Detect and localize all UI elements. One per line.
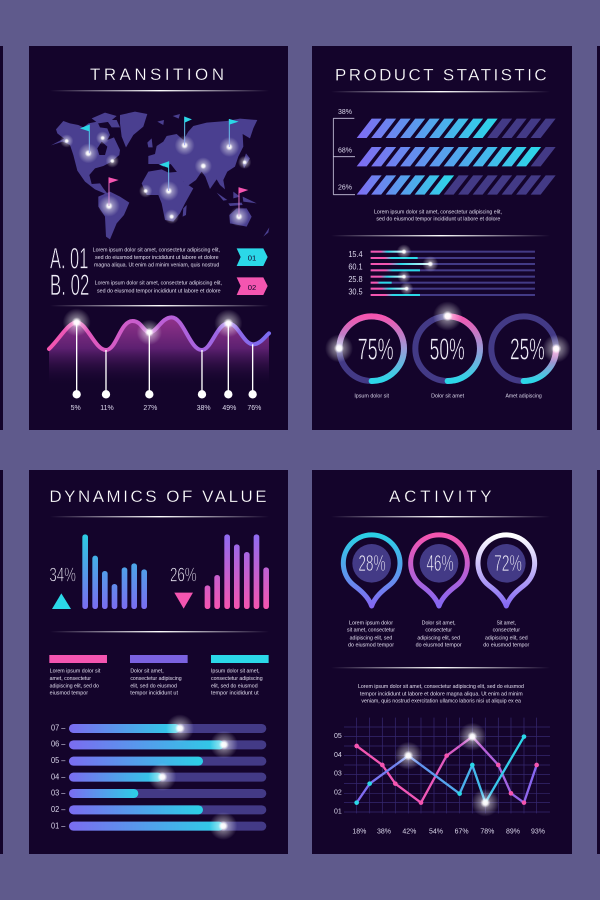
wave area chart: 38%: [197, 405, 211, 412]
horizontal line bars: [348, 244, 535, 297]
striped bar chart: 68%: [338, 147, 352, 154]
pin: 72%: [478, 535, 535, 649]
three text columns: Lorem ipsum dolor sit: [50, 668, 101, 674]
donut: 50%: Dolor sit amet: [431, 393, 465, 399]
legend block: A 01 and B 02: Lorem ipsum dolor sit amet, consectetur adipiscing elit,: [95, 281, 222, 287]
line chart: 01: [334, 809, 342, 816]
horizontal progress bars: 06 –: [51, 739, 66, 749]
activity paragraph: tempor incididunt ut labore et dolore magna aliqua. Ut enim ad minim: [360, 691, 523, 697]
legend block: A 01 and B 02: sed do eiusmod tempor incididunt ut labore et dolore: [97, 288, 221, 294]
line chart: 67%: [455, 828, 469, 835]
line chart: 93%: [531, 828, 545, 835]
pin: 28%: adipiscing elit, sed: [350, 635, 392, 641]
panel: dynamics of value: [29, 470, 288, 854]
line chart: [334, 718, 550, 835]
activity paragraph: Lorem ipsum dolor sit amet, consectetur adipiscing elit, sed do eiusmod: [358, 684, 524, 690]
wave area chart: 49%: [222, 405, 236, 412]
activity paragraph: [358, 684, 524, 705]
pin: 72%: do eiusmod tempor: [483, 643, 530, 649]
three text columns: consectetur adipiscing: [130, 676, 182, 682]
horizontal progress bars: 03 –: [51, 788, 66, 798]
panel: transition: [29, 46, 288, 430]
donut: 75%: Ipsum dolor sit: [354, 393, 390, 399]
legend block: A 01 and B 02: [50, 242, 268, 302]
line chart: 18%: [352, 828, 366, 835]
line chart: 03: [334, 771, 342, 778]
pin: 72%: adipiscing elit, sed: [485, 635, 528, 641]
striped bar chart: Lorem ipsum dolor sit amet, consectetur adipiscing elit,: [374, 209, 502, 215]
line chart: 05: [334, 733, 342, 740]
horizontal progress bars: 05 –: [51, 755, 66, 765]
pink bar chart with 26%: [170, 534, 269, 609]
wave area chart: 5%: [71, 405, 81, 412]
wave area chart: 27%: [143, 405, 157, 412]
donut: 50%: [415, 301, 480, 399]
pin: 28%: do eiusmod tempor: [348, 643, 394, 649]
pin: 72%: Sit amet,: [497, 620, 516, 626]
world map with flags: [51, 112, 269, 239]
three text columns: Ipsum dolor sit amet,: [211, 668, 260, 674]
horizontal line bars: 60.1: [348, 263, 363, 272]
horizontal progress bars: 07 –: [51, 722, 66, 732]
line chart: 78%: [480, 828, 494, 835]
donut: 75%: [325, 316, 404, 399]
horizontal line bars: 25.8: [348, 275, 363, 284]
pin: 46%: adipiscing elit, sed: [417, 635, 460, 641]
line chart: 89%: [506, 828, 520, 835]
line chart: 04: [334, 752, 342, 759]
horizontal progress bars: 04 –: [51, 771, 66, 781]
pin: 46%: 46%: [426, 550, 454, 576]
heading: dynamics of value: DYNAMICS OF VALUE: [49, 487, 267, 506]
pin: 72%: 72%: [494, 550, 522, 576]
pin: 72%: consectetur: [493, 628, 520, 634]
pin: 46%: [411, 535, 467, 649]
donut: 75%: 75%: [358, 332, 394, 366]
three text columns: eiusmod tempor: [50, 691, 88, 697]
panel: activity: [312, 470, 572, 854]
pin: 28%: Lorem ipsum dolor: [349, 620, 393, 626]
pin: 46%: consectetur: [425, 628, 452, 634]
heading: product statistic: PRODUCT STATISTIC: [335, 65, 547, 84]
donut: 25%: 25%: [510, 332, 545, 366]
legend block: A 01 and B 02: Lorem ipsum dolor sit amet, consectetur adipiscing elit,: [93, 247, 220, 253]
legend block: A 01 and B 02: 01: [248, 253, 256, 262]
pin: 46%: Dolor sit amet,: [422, 620, 456, 626]
three text columns: Dolor sit amet,: [130, 668, 164, 674]
three text columns: [49, 655, 269, 697]
activity paragraph: veniam, quis nostrud exercitation ullamco laboris nisi ut aliquip ex ea: [361, 699, 521, 705]
horizontal progress bars: [51, 714, 266, 840]
striped bar chart: 26%: [338, 185, 352, 192]
line chart: 38%: [377, 828, 391, 835]
line chart: 02: [334, 790, 342, 797]
wave area chart: [49, 308, 269, 412]
horizontal progress bars: 01 –: [51, 820, 66, 830]
donut: 25%: [491, 316, 570, 399]
striped bar chart: [333, 109, 556, 223]
blue bar chart with 34%: [49, 534, 147, 609]
three text columns: tempor incididunt ut: [130, 691, 179, 697]
three text columns: elit, sed do eiusmod: [130, 683, 177, 689]
pin: 28%: [343, 535, 400, 649]
pin: 28%: sit amet, consectetur: [347, 628, 395, 634]
heading: transition: TRANSITION: [90, 65, 224, 84]
pin: 28%: 28%: [358, 550, 386, 576]
three text columns: amet, consectetur: [50, 676, 91, 682]
horizontal line bars: 15.4: [348, 250, 363, 259]
three text columns: adipiscing elit, sed do: [50, 683, 99, 689]
line chart: 42%: [402, 828, 416, 835]
legend block: A 01 and B 02: B. 02: [50, 269, 89, 302]
donut: 25%: Amet adipiscing: [505, 393, 542, 399]
legend block: A 01 and B 02: magna aliqua. Ut enim ad minim veniam, quis nostrud: [94, 262, 219, 268]
striped bar chart: 38%: [338, 109, 352, 116]
three text columns: consectetur adipiscing: [211, 676, 263, 682]
donut: 50%: 50%: [430, 332, 465, 366]
heading: activity: ACTIVITY: [389, 487, 492, 506]
panel: product statistic: [312, 46, 572, 430]
horizontal progress bars: 02 –: [51, 804, 66, 814]
legend block: A 01 and B 02: sed do eiusmod tempor incididunt ut labore et dolore: [95, 255, 219, 261]
three text columns: tempor incididunt ut: [211, 691, 259, 697]
blue bar chart with 34%: 34%: [49, 564, 76, 587]
wave area chart: 11%: [100, 405, 114, 412]
legend block: A 01 and B 02: A. 01: [50, 242, 88, 275]
three text columns: elit, sed do eiusmod: [211, 683, 258, 689]
pin: 46%: do eiusmod tempor: [416, 643, 462, 649]
pink bar chart with 26%: 26%: [170, 564, 197, 587]
striped bar chart: sed do eiusmod tempor incididunt ut labore et dolore: [376, 217, 500, 223]
line chart: 54%: [429, 828, 443, 835]
horizontal line bars: 30.5: [348, 288, 363, 297]
legend block: A 01 and B 02: 02: [248, 283, 256, 292]
wave area chart: 76%: [247, 405, 261, 412]
